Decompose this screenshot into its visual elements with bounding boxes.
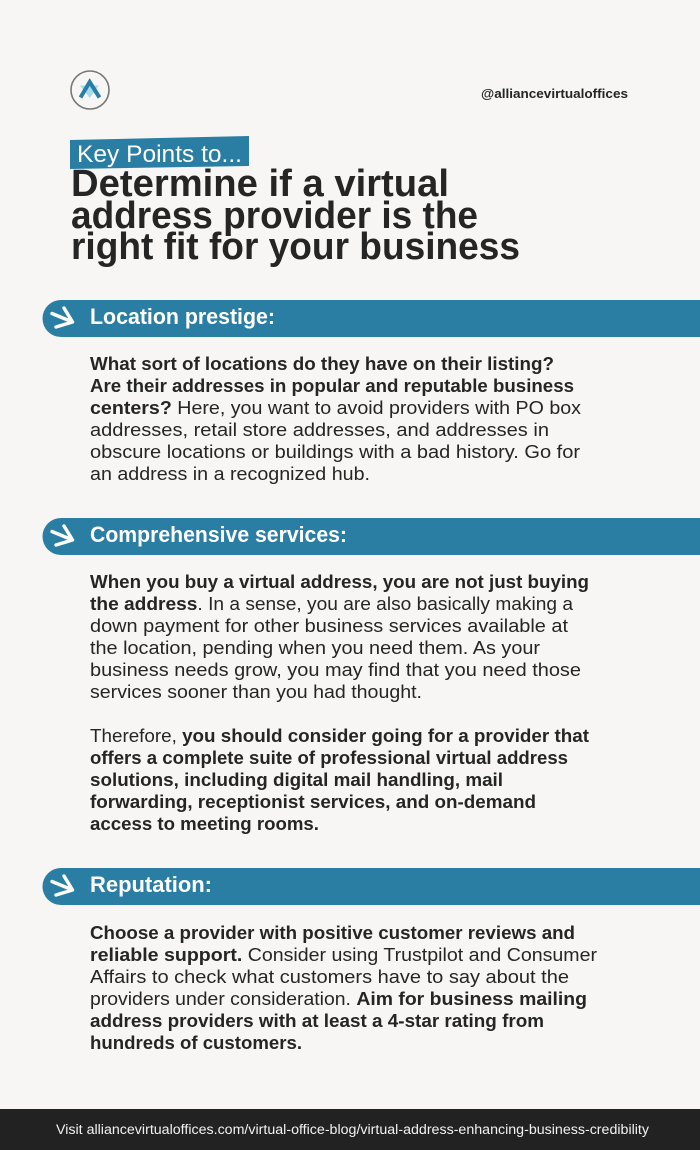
title: address provider is the xyxy=(71,195,478,237)
section header: location prestige xyxy=(43,300,700,337)
title: Determine if a virtual xyxy=(71,163,449,205)
text block: comprehensive services: the location, pending when you need them. As your xyxy=(90,638,540,658)
text block: reputation: hundreds of customers. xyxy=(90,1033,302,1053)
title: right fit for your business xyxy=(71,226,520,268)
text block: reputation: providers under consideration. Aim for business mailing xyxy=(90,989,587,1009)
text block: comprehensive services: Therefore, you should consider going for a provider that xyxy=(90,726,589,746)
title xyxy=(71,163,520,268)
section header: location prestige: Location prestige: xyxy=(90,304,275,329)
section header: comprehensive services xyxy=(43,518,700,555)
footer bar xyxy=(0,1109,700,1150)
social handle: @alliancevirtualoffices xyxy=(481,86,628,101)
panel: comprehensive services xyxy=(43,518,700,834)
text block: location prestige xyxy=(90,354,581,484)
panel: location prestige xyxy=(43,300,700,484)
text block: comprehensive services: When you buy a virtual address, you are not just buying xyxy=(90,572,589,592)
text block: comprehensive services: down payment for other business services available at xyxy=(90,616,568,636)
text block: comprehensive services: forwarding, receptionist services, and on-demand xyxy=(90,792,536,812)
text block: location prestige: obscure locations or buildings with a bad history. Go for xyxy=(90,442,580,462)
text block: location prestige: an address in a recognized hub. xyxy=(90,464,370,484)
text block: comprehensive services: business needs grow, you may find that you need those xyxy=(90,660,581,680)
text block: location prestige: centers? Here, you want to avoid providers with PO box xyxy=(90,398,581,418)
panel: reputation xyxy=(43,868,700,1053)
text block: comprehensive services: offers a complete suite of professional virtual address xyxy=(90,748,568,768)
text block: comprehensive services: solutions, including digital mail handling, mail xyxy=(90,770,503,790)
text block: location prestige: What sort of locations do they have on their listing? xyxy=(90,354,554,374)
text block: comprehensive services: services sooner than you had thought. xyxy=(90,682,422,702)
text block: reputation: Choose a provider with positive customer reviews and xyxy=(90,923,575,943)
section header: reputation xyxy=(43,868,700,905)
logo xyxy=(71,71,109,109)
text block: reputation: Affairs to check what customers have to say about the xyxy=(90,967,569,987)
text block: comprehensive services: the address . In a sense, you are also basically making a xyxy=(90,594,574,614)
text block: location prestige: addresses, retail store addresses, and addresses in xyxy=(90,420,549,440)
footer bar: Visit alliancevirtualoffices.com/virtual-office-blog/virtual-address-enhancing-business-credibility xyxy=(56,1122,649,1137)
text block: location prestige: Are their addresses in popular and reputable business xyxy=(90,376,574,396)
section header: reputation: Reputation: xyxy=(90,872,212,897)
key points tag: Key Points to... xyxy=(77,141,242,168)
text block: comprehensive services xyxy=(90,572,589,834)
text block: reputation: address providers with at least a 4-star rating from xyxy=(90,1011,544,1031)
text block: reputation xyxy=(90,923,597,1053)
text block: reputation: reliable support. Consider using Trustpilot and Consumer xyxy=(90,945,597,965)
section header: comprehensive services: Comprehensive services: xyxy=(90,522,347,547)
text block: comprehensive services: access to meeting rooms. xyxy=(90,814,319,834)
